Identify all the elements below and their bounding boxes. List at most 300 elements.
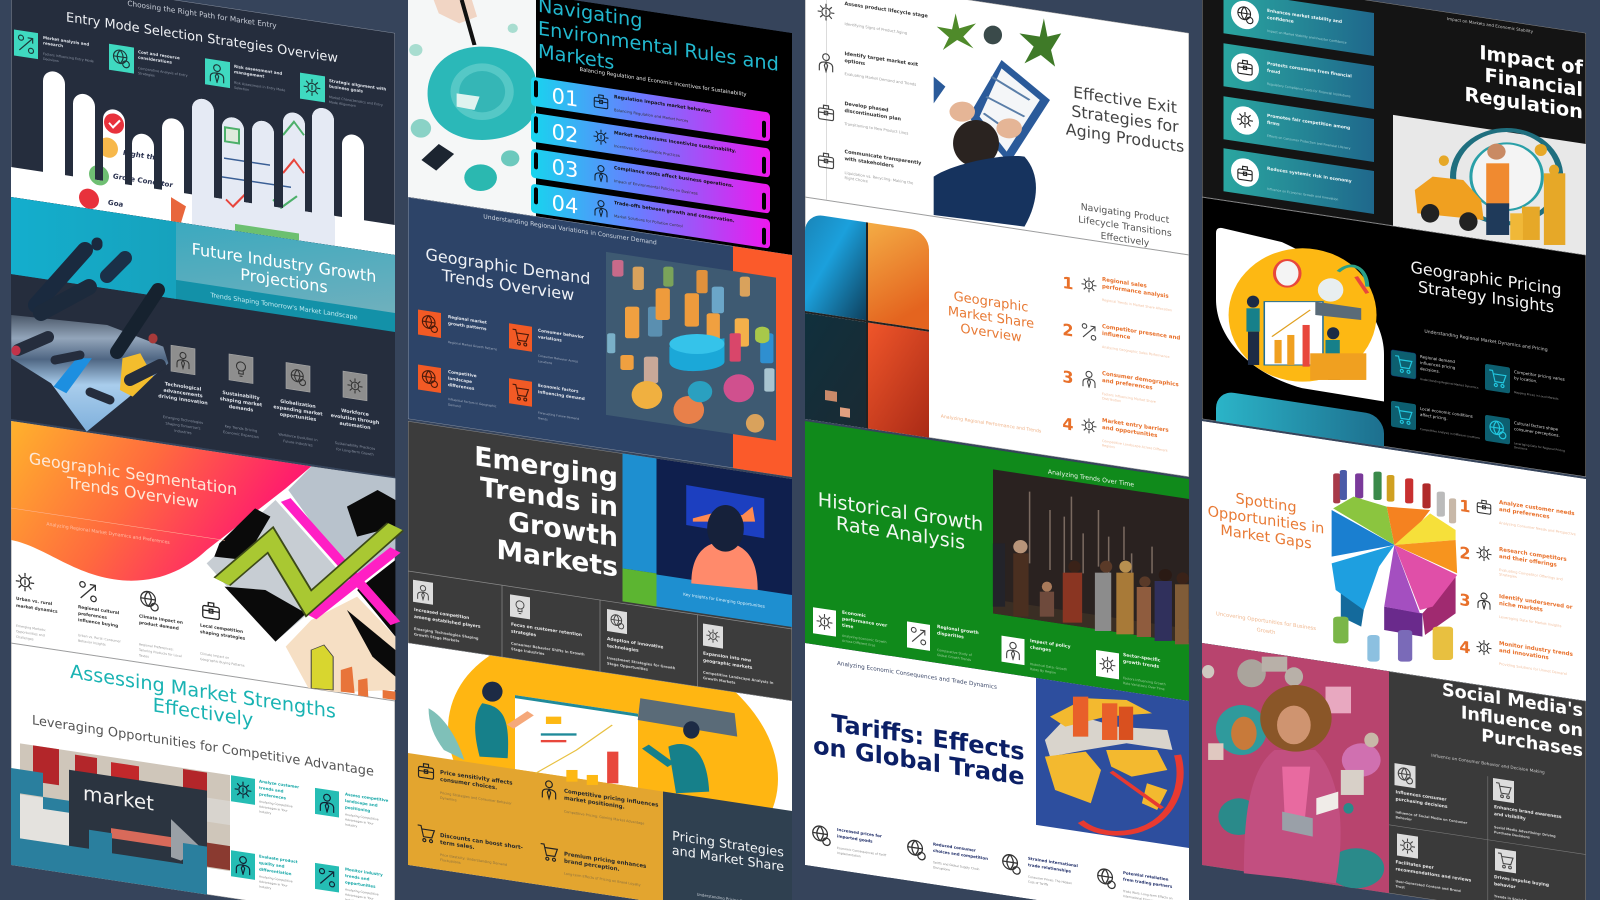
item 3: affect pricing. (1420, 412, 1448, 421)
subtitle: Analyzing Regional Performance and Trends (941, 414, 1042, 435)
viewer at screen illustration (686, 485, 764, 590)
slide background and chalkboard image (11, 643, 395, 900)
slide background and illustration (408, 643, 792, 900)
item 1: trends and (259, 785, 284, 794)
item 2: 2 (1459, 543, 1471, 564)
subtitle: Analyzing Economic Consequences and Trade Dynamics (837, 661, 997, 691)
item 3: Strained international (1028, 856, 1078, 868)
slide background (11, 421, 395, 701)
text content (813, 433, 1166, 691)
item 1 (231, 774, 299, 819)
item 3: Regional Preferences: (139, 642, 174, 652)
item 2: landscape and (345, 798, 378, 808)
card 3: Adoption of innovative (607, 637, 663, 651)
item 1: Regional Market Growth Patterns (448, 340, 497, 352)
slide: geographic demand trends (408, 197, 792, 477)
gradient wave and map image (11, 421, 395, 700)
item 4: 4 (1062, 414, 1074, 435)
item 4: and innovations (1499, 648, 1549, 661)
title: Overview (960, 322, 1022, 346)
item 1: Price sensitivity affects (440, 770, 513, 787)
item 4: Regions (1102, 443, 1115, 449)
item 2: Enhances brand awareness (1494, 805, 1561, 820)
item 3: differentiation (259, 866, 292, 876)
item 4: Economic factors (538, 383, 578, 394)
item 1 (1459, 494, 1576, 536)
item 1: advancements (163, 388, 203, 399)
item 3: Competitive (448, 369, 477, 378)
row 03 (531, 149, 770, 214)
card 3: technologies (607, 643, 639, 654)
man with clipboard photo (934, 13, 1061, 227)
subtitle: Understanding Regional Variations in Consumer Demand (483, 213, 657, 247)
step 3: Develop phased (844, 101, 889, 114)
item 3: Trust (1396, 884, 1405, 890)
text content (413, 432, 774, 691)
card 2: strategies (511, 629, 536, 638)
item 4 (1485, 415, 1565, 457)
item 4: Sector-specific (1123, 653, 1160, 664)
item 1: Factors Influencing Entry Mode (43, 52, 94, 63)
item 3: Fluctuations (440, 858, 461, 865)
item 3: expanding market (273, 404, 323, 418)
item 1: Influences consumer (1396, 790, 1447, 803)
item 3: Analyzing Competitive (259, 874, 293, 884)
item 2 (78, 581, 121, 649)
item 2: and their offerings (1499, 554, 1558, 569)
item 3: 3 (1459, 590, 1471, 611)
item 2: Strategies (138, 71, 155, 78)
presenters with chart illustration (1229, 248, 1377, 382)
row 3 (1224, 96, 1374, 162)
row 1: Impact on Market Stability and Investor Confidence (1267, 29, 1347, 45)
item 1 (158, 343, 208, 438)
item 3: differences (448, 382, 475, 391)
item 1 (418, 763, 513, 811)
item 2: Behavior Insights (78, 639, 106, 647)
step 3 (818, 97, 908, 136)
title: Markets (496, 534, 618, 584)
row 02 (531, 113, 770, 178)
item 1: 1 (1062, 273, 1074, 294)
item 4: Cultural factors shape (1514, 420, 1558, 432)
item 1: Regional sales (1102, 277, 1147, 290)
item 1: Across Different Eras (842, 639, 876, 648)
step 3: Transitioning to New Product Lines (844, 122, 908, 136)
item 3: Identify underserved or (1499, 594, 1572, 611)
slide: social media's influence on purchases (1202, 643, 1586, 900)
item 3: management (234, 69, 264, 79)
item 3 (1003, 852, 1078, 891)
item 4: Local competition (200, 624, 243, 635)
item 2: Competitor presence and (1102, 324, 1180, 342)
row 02: Market mechanisms incentivize sustainability. (614, 130, 736, 155)
item 1: Economic (842, 611, 866, 619)
item 3: Industry (259, 884, 271, 890)
row 2: Protects consumers from financial (1267, 62, 1352, 80)
item 4: Sustainability Practices (335, 441, 375, 451)
item 3 (205, 58, 285, 97)
item 4 (1494, 848, 1566, 900)
card 2: Stage Industries (511, 647, 544, 656)
item 3 (1002, 634, 1071, 677)
item 4: consumer perceptions. (1514, 426, 1560, 438)
item 1 (16, 572, 58, 645)
item 2: positioning (345, 804, 370, 813)
row 2: fraud (1267, 68, 1280, 76)
item 4: Workforce (341, 409, 369, 418)
text content (14, 0, 386, 113)
item 4: Rate Variations Over Time (1123, 681, 1165, 691)
slide background and blob (1202, 197, 1586, 506)
slide: tariffs effects on global trade (805, 643, 1189, 900)
item 2: Research competitors (1499, 547, 1567, 563)
item 3 (1396, 833, 1472, 900)
item 1: Regional market (448, 314, 487, 325)
item 2 (542, 780, 659, 828)
item 2 (109, 44, 188, 83)
item 4: growth trends (1123, 659, 1159, 670)
subtitle: Balancing Regulation and Economic Incentives for Sustainability (580, 67, 746, 98)
item 2: influence (1102, 331, 1131, 341)
item 2: Global Growth Trends (937, 653, 971, 662)
text content (158, 234, 380, 464)
title: Market Share (948, 304, 1034, 332)
item 2 (509, 323, 585, 370)
item 1: research (43, 40, 63, 48)
item 4: Potential retaliation (1123, 870, 1168, 882)
title: Influence on (1461, 703, 1583, 742)
card 4: Competitive Landscape Analysis in (703, 671, 773, 685)
card 1: Growth Stage Markets (414, 632, 459, 643)
item 2: Analyzing Geographic Sales Performance (1102, 345, 1169, 359)
item 2: Urban vs. Rural: Consumer (78, 633, 121, 644)
title: Effectively (153, 694, 253, 732)
item 2: and visibility (1494, 811, 1526, 822)
subtitle: Uncovering Opportunities for Business (1216, 611, 1316, 632)
item 3: 3 (1062, 367, 1074, 388)
item 4 (331, 369, 380, 458)
slide background (408, 0, 792, 255)
item 4: 4 (1459, 637, 1471, 658)
item 1: Analyzing Economic Growth (842, 634, 886, 644)
item 3 (138, 590, 183, 664)
item 4: Monitor industry (345, 866, 383, 877)
title: Trends in (480, 472, 618, 524)
item 2: Consumer Behavior Across (538, 354, 578, 364)
item 3: term sales. (440, 840, 475, 851)
item 1: Analyzing Competitive (259, 799, 293, 809)
card 4 (703, 624, 774, 691)
title: Regulation (1464, 83, 1583, 124)
item 1: Pricing Strategies and Consumer Behavior (440, 791, 512, 806)
item 3 (418, 365, 497, 414)
item 3: Facilitates peer (1396, 860, 1434, 871)
item 3: Demand (448, 403, 461, 408)
item 1: Analyzing Consumer Needs and Perspective (1499, 521, 1576, 536)
item 3: Future Industries (283, 439, 313, 448)
item 2: Industry (345, 822, 357, 828)
item 1: purchasing decisions (1396, 796, 1448, 810)
slide: effective exit strategies (805, 0, 1189, 255)
row 2: Regulatory Compliance Costs for Financial Institutions (1267, 82, 1351, 98)
title: Emerging (474, 441, 618, 494)
slide background (805, 421, 1189, 701)
item 1 (418, 310, 497, 352)
item 4 (200, 601, 246, 668)
row 3: Effects on Consumer Protection and Financial Literacy (1267, 134, 1351, 150)
item 3: Climate impact on (139, 614, 183, 626)
step 2: options (844, 58, 865, 67)
row 3: Promotes fair competition among (1267, 114, 1350, 131)
item 1: Market analysis and (43, 35, 89, 47)
title: Strategy Insights (1418, 277, 1554, 317)
item 4 (315, 862, 383, 900)
step 2 (819, 47, 919, 87)
card 2: Consumer Behavior Shifts in Growth (511, 642, 585, 657)
item 4: Leveraging Data for Regional Pricing (1514, 441, 1565, 453)
3D pie chart with figures (1332, 470, 1457, 662)
item 1: influences pricing (1420, 360, 1456, 370)
item 1 (1062, 271, 1172, 312)
item 2: Disruptions (933, 865, 950, 872)
step 4: Liquidation vs. Recycling: Making the (844, 171, 913, 185)
item 4: Factors Influencing Growth (1123, 676, 1166, 686)
item 1: Regional Trends in Market Share Allocation (1102, 298, 1172, 312)
item 3: Impact of policy (1030, 639, 1071, 650)
item 3 (1062, 365, 1179, 412)
subtitle: Impact on Markets and Economic Stability (1447, 16, 1534, 34)
item 1: market dynamics (16, 603, 58, 615)
item 1: Emerging Markets: (16, 624, 46, 632)
card 1: among established players (414, 614, 481, 630)
item 2: Mapping Prices in Local Markets (1514, 390, 1559, 401)
item 1: Decisions (43, 57, 59, 63)
item 2: choices and competition (933, 848, 988, 861)
item 4: from trading partners (1123, 877, 1173, 889)
step 2: Evaluating Market Demand and Trends (844, 72, 916, 87)
row 01: 01 (552, 83, 578, 112)
card 2 (510, 594, 585, 662)
item 3: Workforce Evolution in (278, 432, 318, 442)
title: Social Media's (1442, 680, 1583, 722)
item 3: User-Generated Content and Brand (1396, 879, 1461, 893)
row 4: Influence on Economic Growth and Innovation (1267, 187, 1338, 202)
car and coins illustration (1415, 130, 1565, 245)
card 1 (413, 580, 481, 646)
item 2 (1062, 318, 1180, 361)
item 4 (509, 378, 585, 427)
item 4: automation (339, 421, 371, 431)
item 2 (220, 353, 263, 440)
infographic photo (409, 0, 536, 191)
item 4: brand perception. (564, 859, 620, 873)
row 2 (1224, 43, 1374, 109)
title: Geographic Demand (426, 245, 590, 289)
item 3: Globalization (280, 400, 316, 410)
item 4: Decisions (1514, 445, 1528, 451)
item 2: market positioning. (564, 796, 625, 811)
item 3 (1459, 588, 1573, 630)
title: Effective Exit (1073, 83, 1177, 117)
item 2: Sustainability (222, 391, 260, 402)
item 3: Risk assessment and (234, 64, 282, 76)
item 2: Reduced consumer (933, 841, 976, 853)
item 1 (1391, 350, 1479, 390)
item 4: Market Characteristics and Entry (329, 95, 383, 107)
item 4 (541, 844, 647, 888)
slide: navigating environmental rules (408, 0, 792, 255)
slide: emerging trends in growth markets (408, 421, 792, 701)
item 4: Drives impulse buying (1494, 875, 1549, 888)
title: Assessing Market Strengths (70, 660, 336, 723)
row 04: 04 (552, 190, 578, 219)
title: Impact of (1479, 41, 1583, 80)
chalkboard word: market (83, 781, 154, 816)
subtitle: Leveraging Opportunities for Competitive Advantage (32, 713, 374, 780)
item 4: behavior (1494, 881, 1517, 890)
item 1: Challenges (16, 635, 34, 641)
item 4: Long-term Effects of Pricing on Brand Loyalty (564, 872, 641, 887)
item 2 (908, 838, 988, 878)
text content (531, 0, 779, 250)
title: Growth (508, 506, 618, 554)
item 1 (1394, 763, 1468, 830)
text content (1224, 0, 1584, 246)
item 3: product demand (139, 620, 179, 632)
item 4: for Long-Term Growth (336, 447, 374, 457)
item 2: Locations (538, 359, 553, 365)
text content (1391, 255, 1565, 457)
step 3: discontinuation plan (844, 108, 901, 123)
item 3: landscape (448, 376, 472, 384)
step 4: Communicate transparently (844, 149, 921, 167)
card 3: Stage Opportunities (607, 662, 648, 672)
title: Financial (1485, 64, 1583, 102)
item 2: Cost and resource (138, 49, 180, 60)
item 2 (315, 787, 389, 833)
title: Rate Analysis (836, 512, 965, 554)
item 4: opportunities (345, 879, 376, 889)
item 1: Increased prices for (837, 827, 882, 839)
card 3: Investment Strategies for Growth (607, 656, 675, 670)
row 01: Balancing Regulation and Market Forces (614, 108, 688, 123)
item 1: consumer choices. (440, 777, 497, 791)
title: Pricing Strategies (672, 829, 784, 861)
title: and Market Share (672, 843, 784, 875)
item 2: Social Media Advertising: Driving (1494, 825, 1556, 838)
card 4: Growth Markets (703, 676, 735, 685)
item 4 (1096, 648, 1166, 691)
item 2: Tariffs and Global Supply Chain (933, 860, 979, 871)
item 2: 2 (1062, 320, 1074, 341)
caption: Key Insights for Emerging Opportunities (683, 592, 765, 609)
item 2: Comparative Analysis of Entry (138, 66, 188, 78)
row 1: confidence (1267, 15, 1294, 25)
row 1: Enhances market stability and (1267, 9, 1342, 25)
row 4: Reduces systemic risk in economy (1267, 166, 1352, 185)
item 1: Analyze customer (259, 778, 299, 789)
item 3: Distribution (1102, 396, 1121, 403)
row 03: 03 (552, 154, 578, 183)
item 1: time (842, 623, 853, 630)
title: Purchases (1481, 726, 1583, 762)
slide background (1202, 0, 1586, 255)
item 2: Strategies (1499, 572, 1517, 579)
title: on Global Trade (813, 731, 1024, 791)
step 2: Identify target market exit (844, 51, 918, 68)
item 1: Dynamics (440, 796, 457, 802)
item 3 (231, 849, 298, 894)
item 2: Competitive Pricing: Gaining Market Advantage (564, 810, 644, 826)
item 4: Trends (537, 416, 548, 422)
title: Opportunities in (1208, 503, 1324, 537)
text content (813, 657, 1173, 900)
title: Aging Products (1066, 119, 1184, 156)
text content (418, 761, 784, 900)
slide background and comb image: Right the (123, 148, 160, 162)
3D pegs photo (607, 260, 774, 433)
row 01 (531, 77, 770, 142)
item 1: Shaping Tomorrow's (166, 421, 201, 431)
card 1: Emerging Technologies Shaping (414, 627, 478, 641)
text content (941, 253, 1180, 459)
item 4 (300, 73, 386, 113)
item 3: Tailoring Products for Local (138, 648, 182, 658)
subtitle: Navigating Product (1081, 202, 1169, 226)
item 3: Evaluate product (259, 853, 297, 864)
slide: impact of financial regulation (1202, 0, 1586, 255)
row 04: Market Solutions for Pollution Control (614, 214, 683, 228)
item 2: by location. (1514, 375, 1537, 384)
item 4 (1062, 412, 1169, 458)
card 4: Expansion into new (703, 652, 751, 664)
item 1: Understanding Regional Market Dynamics (1420, 377, 1479, 390)
group of people and poles photo (993, 492, 1189, 644)
item 3: Local economic conditions (1420, 406, 1473, 419)
step 1: Identifying Signs of Product Aging (844, 22, 908, 36)
row 03: Impact of Environmental Policies on Business (614, 179, 698, 196)
item 1 (14, 29, 94, 68)
slide: assessing market strengths (11, 643, 395, 900)
item 1: 1 (1459, 496, 1471, 517)
item 2 (1485, 364, 1565, 402)
slide: future industry growth projections (11, 197, 395, 477)
item 4: business goals (329, 84, 364, 94)
item 3: Cost of Tariffs (1028, 880, 1049, 887)
item 1: Opportunities and (16, 629, 45, 638)
item 1: Behavior (1396, 815, 1412, 822)
step 4: with stakeholders (844, 156, 894, 169)
item 3: opportunities (280, 412, 316, 423)
step 1: Assess product lifecycle stage (844, 1, 928, 20)
step 1 (818, 0, 928, 39)
item 2: Regional cultural (78, 605, 119, 616)
item 3: Tastes (138, 653, 149, 659)
title: Trends Overview (66, 473, 199, 512)
item 3 (418, 825, 523, 874)
slide background (1202, 421, 1586, 701)
title: Entry Mode Selection Strategies Overview (66, 10, 338, 66)
title: Market Gaps (1220, 522, 1312, 553)
text content (418, 204, 657, 438)
text content (11, 446, 246, 673)
item 1: growth patterns (448, 321, 487, 331)
item 1: Urban vs. rural (16, 597, 52, 607)
item 3 (273, 361, 323, 449)
step 4 (818, 145, 922, 192)
item 2: Purchase Decisions (1494, 830, 1530, 839)
